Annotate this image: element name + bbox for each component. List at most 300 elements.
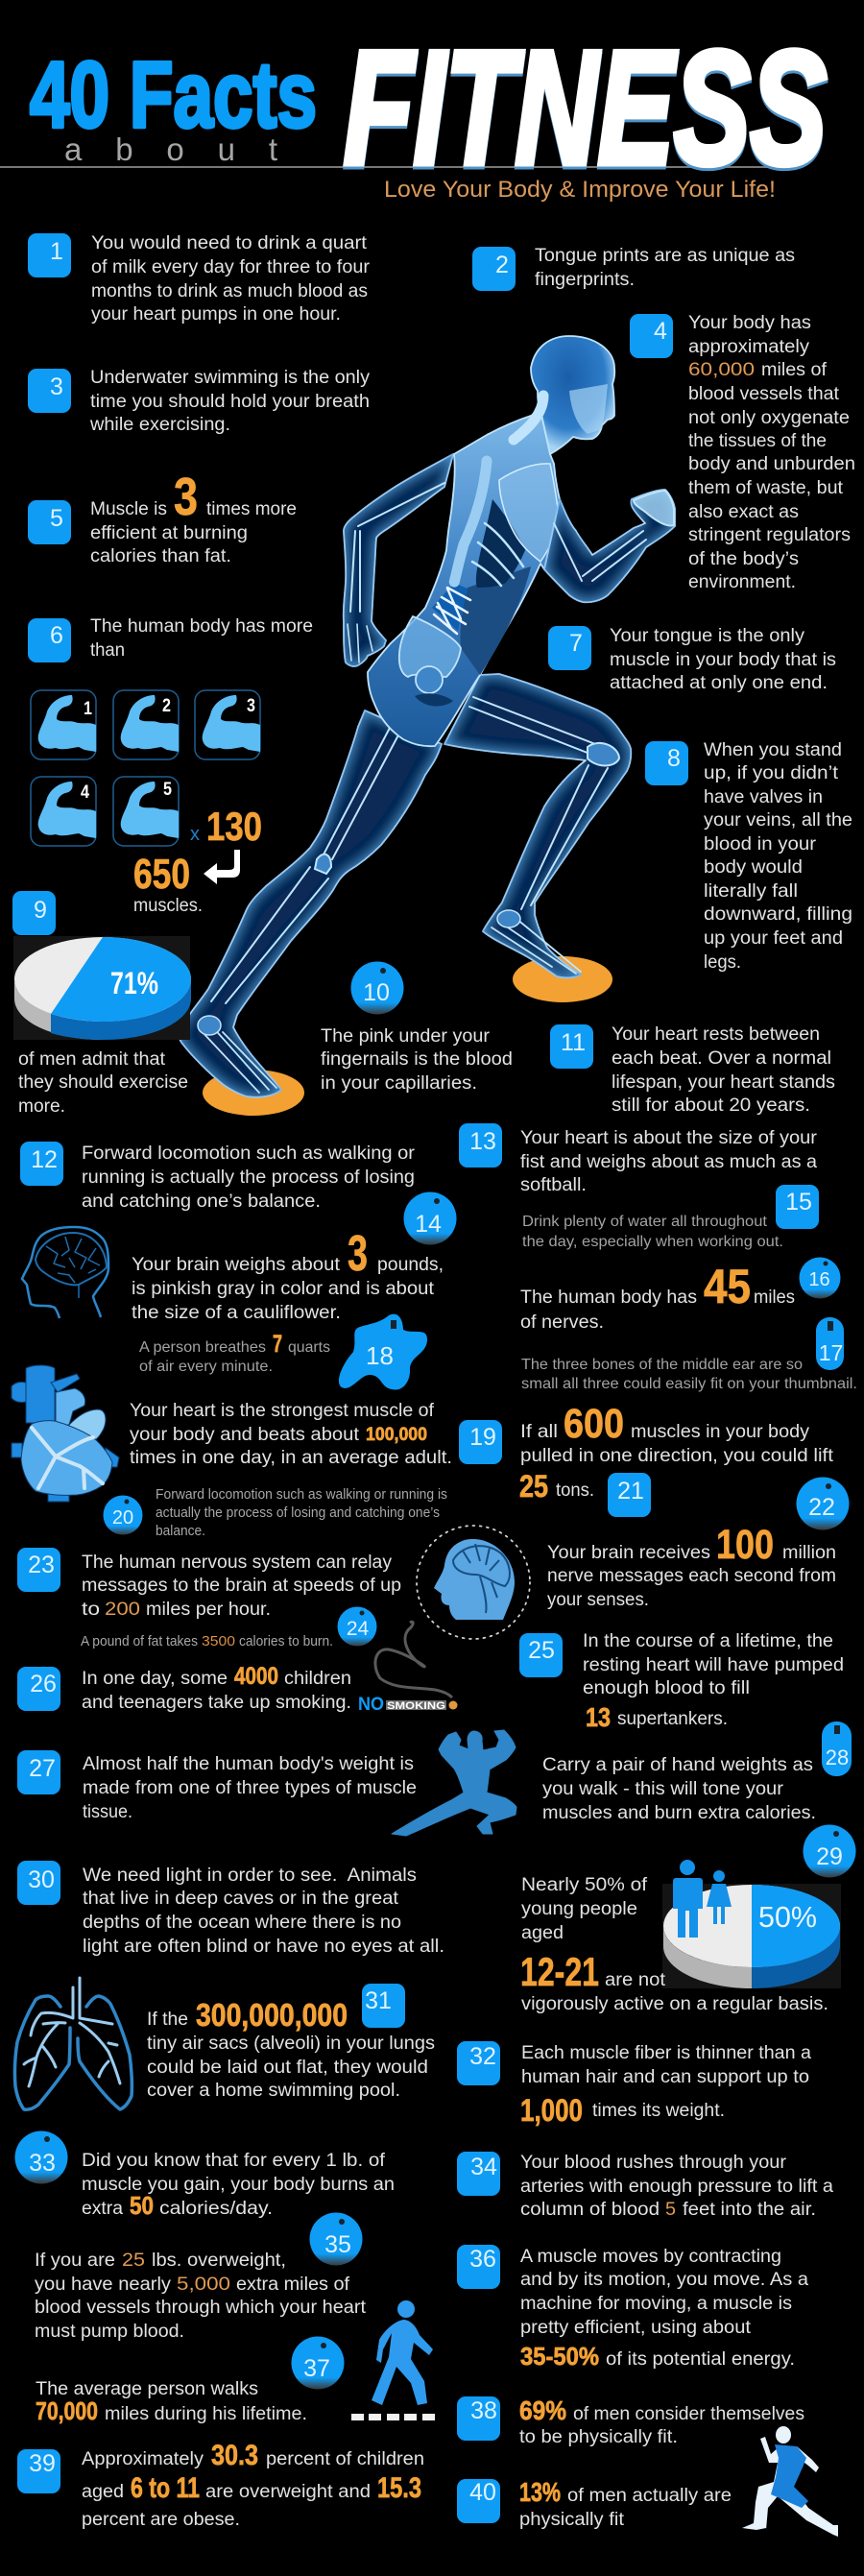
badge 32 xyxy=(457,2041,500,2085)
badge 25 xyxy=(519,1633,563,1677)
badge 8: 8 xyxy=(667,745,681,772)
torso and hip xyxy=(368,410,576,746)
fact 32 text: times its weight. xyxy=(592,2101,725,2121)
badge 39 xyxy=(17,2449,60,2493)
badge 5 xyxy=(28,500,71,544)
fact 9 text xyxy=(18,1049,188,1117)
fact 10 text: fingernails is the blood xyxy=(321,1049,513,1070)
no smoking cigarette with smoke: NO xyxy=(358,1695,384,1715)
pie chart 71 percent: 71% xyxy=(110,966,158,1000)
fact 7 text: muscle in your body that is xyxy=(610,650,836,670)
fact 38 text: of men consider themselves xyxy=(573,2404,804,2424)
fact 24 text: 3500 xyxy=(202,1633,235,1649)
badge 6 xyxy=(28,618,71,662)
fact 12 text: and catching one’s balance. xyxy=(82,1192,321,1212)
fact 4 text: Your body has xyxy=(688,313,811,333)
fact 32 xyxy=(457,2041,811,2128)
fact 14 text xyxy=(132,1226,444,1323)
fact 2 text xyxy=(535,246,795,290)
fact 12 text xyxy=(82,1144,416,1212)
fact 5 text xyxy=(90,467,297,566)
fact 4 text: blood vessels that xyxy=(688,384,840,404)
rear leg xyxy=(179,710,442,1097)
title: about: about xyxy=(64,132,277,167)
pelvis xyxy=(399,616,461,706)
belly xyxy=(460,566,531,675)
fact 31 text: tiny air sacs (alveoli) in your lungs xyxy=(147,2034,435,2054)
icon: flexed arm 4 xyxy=(31,777,96,846)
tag 14: 14 xyxy=(415,1211,442,1238)
fact 19 text: 25 xyxy=(519,1469,548,1504)
fact 16 text: of nerves. xyxy=(520,1312,604,1333)
fact 18 text: A person breathes xyxy=(139,1339,266,1356)
fact 10 text xyxy=(321,1026,513,1094)
fact 34 text: column of blood xyxy=(520,2200,660,2220)
badge 36: 36 xyxy=(469,2246,496,2273)
fact 12 xyxy=(20,1142,416,1212)
fact 6 xyxy=(28,616,313,916)
fact 28 text: you walk - this will tone your xyxy=(542,1779,784,1799)
tag 22 xyxy=(797,1477,849,1530)
rule xyxy=(0,166,778,168)
badge 12: 12 xyxy=(31,1146,58,1173)
fact 4 text: body and unburden xyxy=(688,454,855,474)
fact 33 text: Did you know that for every 1 lb. of xyxy=(82,2151,386,2171)
fact 5 text: calories than fat. xyxy=(90,546,231,566)
fact 35 text: If you are xyxy=(35,2251,115,2271)
badge 27: 27 xyxy=(29,1755,56,1782)
fact 7 text: attached at only one end. xyxy=(610,673,828,693)
rear arm bones xyxy=(348,483,444,662)
badge 26 xyxy=(17,1667,60,1711)
fact 2 text: fingerprints. xyxy=(535,270,635,290)
badge 2 xyxy=(472,247,516,291)
fact 30 text xyxy=(83,1866,444,1957)
fact 16 text: 45 xyxy=(704,1260,751,1313)
fact 4 text: 60,000 xyxy=(688,360,755,380)
fact 32 text: human hair and can support up to xyxy=(521,2067,809,2087)
fact 29 text: vigorously active on a regular basis. xyxy=(521,1994,828,2014)
badge 6: 6 xyxy=(50,622,63,649)
fact 39 xyxy=(17,2440,424,2530)
fact 34 xyxy=(457,2152,833,2220)
fact 25 text: enough blood to fill xyxy=(583,1678,750,1698)
fact 5 text: 3 xyxy=(174,467,198,526)
badge 27 xyxy=(17,1750,60,1794)
lumbar block xyxy=(432,583,468,631)
fact 39 text: 6 to 11 xyxy=(131,2472,200,2504)
badge 21 xyxy=(608,1473,651,1517)
fact 15 text: Drink plenty of water all throughout xyxy=(522,1214,768,1230)
fact 13 text: softball. xyxy=(520,1175,587,1195)
ribcage hollow xyxy=(476,499,525,588)
fact 14 text: is pinkish gray in color and is about xyxy=(132,1279,435,1299)
fact 4 xyxy=(630,313,855,592)
fact 6 text: than xyxy=(90,640,125,661)
front leg bones xyxy=(469,697,619,974)
fact 15 text: the day, especially when working out. xyxy=(522,1234,783,1250)
front arm xyxy=(544,490,675,602)
tag 29: 29 xyxy=(816,1843,843,1870)
badge 13 xyxy=(459,1123,502,1168)
icon: running man xyxy=(742,2426,838,2537)
fact 20 text: Forward locomotion such as walking or running is xyxy=(156,1486,447,1503)
fact 31 xyxy=(147,1984,435,2101)
fact 16 text: miles xyxy=(754,1288,795,1308)
icon: flexed arm 2 xyxy=(113,690,179,759)
badge 1: 1 xyxy=(50,238,63,265)
badge 2: 2 xyxy=(495,252,509,278)
fact 37 xyxy=(36,2300,435,2425)
fact 29 text: are not xyxy=(605,1970,666,1990)
fact 39 text xyxy=(82,2440,424,2530)
fact 13 text: fist and weighs about as much as a xyxy=(520,1152,817,1172)
fact 20 text xyxy=(156,1486,447,1539)
tag 28 xyxy=(822,1721,852,1776)
badge 3: 3 xyxy=(50,373,63,400)
fact 23 text: to xyxy=(82,1600,100,1620)
badge 15: 15 xyxy=(785,1189,812,1216)
icon: dashed ground xyxy=(351,2414,435,2420)
fact 29 text: young people xyxy=(521,1899,637,1919)
fact 27 text: Almost half the human body's weight is xyxy=(83,1754,414,1774)
fact 7 xyxy=(548,626,836,693)
fact 39 text: 15.3 xyxy=(377,2472,421,2504)
fact 1 text xyxy=(91,233,371,325)
fact 23 text: The human nervous system can relay xyxy=(82,1553,393,1573)
fact 34 text: feet into the air. xyxy=(683,2200,816,2220)
fact 8 text: up, if you didn’t xyxy=(704,763,839,783)
fact 9 xyxy=(12,891,191,1117)
neck vertebrae xyxy=(514,396,543,440)
fact 8 text: blood in your xyxy=(704,834,817,855)
fact 4 text: not only oxygenate xyxy=(688,408,850,428)
fact 28 xyxy=(542,1721,852,1823)
fact 8 text: When you stand xyxy=(704,740,842,760)
fact 19 text: If all xyxy=(520,1422,558,1442)
icon: man and woman xyxy=(673,1860,732,1938)
fact 14 text: the size of a cauliflower. xyxy=(132,1303,341,1323)
fact 4 text: environment. xyxy=(688,572,796,592)
badge 36 xyxy=(457,2245,500,2289)
fact 11 text xyxy=(612,1024,835,1116)
fact 35 text: must pump blood. xyxy=(35,2322,184,2342)
fact 8 text: body would xyxy=(704,857,803,878)
fact 8 text: your veins, all the xyxy=(704,810,852,831)
fact 8 text: up your feet and xyxy=(704,928,843,949)
tag 16: 16 xyxy=(808,1269,830,1290)
fact 3 text: Underwater swimming is the only xyxy=(90,368,371,388)
fact 4 text: also exact as xyxy=(688,502,799,522)
fact 33 text: extra xyxy=(82,2199,123,2219)
badge 38 xyxy=(457,2396,500,2441)
fact 34 text: arteries with enough pressure to lift a xyxy=(520,2177,833,2197)
fact 22 text: Your brain receives xyxy=(547,1543,710,1563)
fact 19 text: pulled in one direction, you could lift xyxy=(520,1446,834,1466)
fact 1 text: of milk every day for three to four xyxy=(91,257,371,277)
tag 10: 10 xyxy=(363,979,390,1006)
badge 7: 7 xyxy=(569,630,583,657)
fact 11 xyxy=(550,1024,835,1116)
fact 35 text: 25 xyxy=(122,2251,145,2271)
tagline: Love Your Body & Improve Your Life! xyxy=(384,177,776,203)
badge 25: 25 xyxy=(528,1637,555,1664)
fact 25 text: supertankers. xyxy=(617,1709,728,1729)
fact 40 xyxy=(457,2477,732,2530)
badge 34 xyxy=(457,2152,500,2196)
fact 5 text: times more xyxy=(206,499,297,519)
fact 33 text: muscle you gain, your body burns an xyxy=(82,2175,395,2195)
fact 6 text xyxy=(90,616,313,661)
fact 13 text: Your heart is about the size of your xyxy=(520,1128,818,1148)
fact 27 text: tissue. xyxy=(83,1802,132,1822)
badge 1 xyxy=(28,233,71,277)
fact 4 text: miles of xyxy=(761,360,828,380)
fact 40 text: of men actually are xyxy=(567,2486,732,2506)
fact 19 text: muscles in your body xyxy=(631,1422,810,1442)
fact: heart strongest muscle: times in one day, in an average adult. xyxy=(130,1448,452,1468)
fact 1 text: months to drink as much blood as xyxy=(91,281,368,301)
skull face bones xyxy=(569,384,608,434)
fact 27 xyxy=(17,1730,516,1836)
fact 28 text xyxy=(542,1755,816,1823)
fact 6 text: The human body has more xyxy=(90,616,313,637)
fact 35 xyxy=(35,2212,367,2342)
fact 12 text: running is actually the process of losing xyxy=(82,1168,415,1188)
fact 38 text xyxy=(519,2395,804,2447)
fact 39 text: are overweight and xyxy=(205,2482,371,2502)
head xyxy=(531,336,614,454)
tag 16 xyxy=(799,1258,841,1298)
multiplier x 130: x xyxy=(190,824,200,845)
tag 33 xyxy=(15,2131,67,2183)
badge 21: 21 xyxy=(617,1478,644,1505)
icon: flexed arm 2: 2 xyxy=(162,696,171,716)
badge 15 xyxy=(776,1185,819,1229)
icon: flexed arm 1: 1 xyxy=(84,699,92,719)
front leg xyxy=(444,674,631,977)
fact 8 text: legs. xyxy=(704,952,741,973)
fact 31 text: If the xyxy=(147,2010,188,2030)
fact: heart strongest muscle xyxy=(130,1401,452,1468)
fact 1 xyxy=(28,233,371,325)
badge 3 xyxy=(28,369,71,413)
fact 32 text: 1,000 xyxy=(520,2093,583,2128)
fact 3 text: while exercising. xyxy=(89,415,230,435)
fact 36 text: and by its motion, you move. As a xyxy=(520,2270,808,2290)
fact: heart strongest muscle: your body and beats about xyxy=(130,1425,360,1445)
fact 36 text xyxy=(520,2247,808,2371)
fact 36 text: A muscle moves by contracting xyxy=(520,2247,781,2267)
rear arm xyxy=(344,454,453,666)
fact 33 xyxy=(15,2131,395,2220)
fact 30 text: that live in deep caves or in the great xyxy=(83,1889,399,1909)
fact 33 text: calories/day. xyxy=(159,2199,273,2219)
fact 14 text: Your brain weighs about xyxy=(132,1255,341,1275)
runner figure on orange discs xyxy=(179,336,675,1116)
fact 19 text: tons. xyxy=(556,1481,594,1501)
badge 12 xyxy=(20,1142,63,1186)
fact 23 text: messages to the brain at speeds of up xyxy=(82,1576,401,1596)
fact 17 text xyxy=(521,1357,857,1392)
header xyxy=(0,17,827,203)
fact 30 xyxy=(17,1861,444,1957)
fact 29 text: 12-21 xyxy=(520,1949,599,1994)
fact 2 xyxy=(472,246,795,291)
fact 8 text: downward, filling xyxy=(704,904,852,925)
badge 23: 23 xyxy=(28,1552,55,1578)
fact 3 text: time you should hold your breath xyxy=(90,392,370,412)
fact 26 xyxy=(17,1622,457,1715)
fact 12 text: Forward locomotion such as walking or xyxy=(82,1144,416,1164)
tag 14 xyxy=(403,1192,457,1244)
tag 10 xyxy=(351,962,403,1014)
fact 30 text: depths of the ocean where there is no xyxy=(83,1913,401,1933)
icon: flexed arm 4: 4 xyxy=(81,782,89,803)
icon: lungs xyxy=(14,1978,132,2109)
fact 37 text: The average person walks xyxy=(36,2379,258,2399)
fact 34 text: 5 xyxy=(665,2200,676,2220)
fact 34 text: Your blood rushes through your xyxy=(520,2153,787,2173)
fact 39 text: percent are obese. xyxy=(82,2510,240,2530)
fact 7 text: Your tongue is the only xyxy=(610,626,805,646)
fact: heart strongest muscle: 100,000 xyxy=(366,1425,427,1445)
fact 40 text: physically fit xyxy=(519,2510,625,2530)
icon: flexed arm 5 xyxy=(113,777,179,846)
badge 5: 5 xyxy=(50,505,63,532)
tag 18 blob xyxy=(339,1314,427,1389)
fact 18 text: quarts xyxy=(288,1339,330,1356)
fact 19 text xyxy=(519,1401,834,1504)
fact 15 xyxy=(522,1185,819,1250)
arrow: return xyxy=(204,850,240,884)
fact 13 text xyxy=(520,1128,818,1195)
fact 37 text: 70,000 xyxy=(36,2396,98,2425)
fact 29 text xyxy=(520,1875,828,2014)
fact 32 text: Each muscle fiber is thinner than a xyxy=(521,2043,811,2063)
fact 14 xyxy=(22,1192,457,1323)
tag 28: 28 xyxy=(826,1745,849,1769)
fact 23 text: miles per hour. xyxy=(146,1600,271,1620)
tag 20 xyxy=(104,1496,142,1534)
fact 37 text xyxy=(36,2379,307,2425)
tag 35: 35 xyxy=(324,2231,351,2258)
fact 8 text: have valves in xyxy=(704,787,823,807)
badge 9: 9 xyxy=(34,897,47,924)
fact 23 text xyxy=(82,1553,401,1620)
fact 17 text: The three bones of the middle ear are so xyxy=(521,1357,803,1373)
fact 11 text: each beat. Over a normal xyxy=(612,1048,831,1069)
fact 25 text: In the course of a lifetime, the xyxy=(583,1631,833,1651)
fact 11 text: still for about 20 years. xyxy=(612,1095,810,1116)
fact 38 xyxy=(457,2395,804,2447)
fact 30 text: We need light in order to see. Animals xyxy=(83,1866,417,1886)
fact 36 text: machine for moving, a muscle is xyxy=(520,2294,792,2314)
fact 20 xyxy=(104,1486,447,1539)
fact 4 text xyxy=(688,313,855,592)
fact 39 text: 30.3 xyxy=(211,2440,258,2471)
fact 20 text: balance. xyxy=(156,1523,205,1539)
fact 34 text xyxy=(520,2153,833,2220)
fact 36 text: 35-50% xyxy=(520,2342,599,2371)
fact 31 text xyxy=(147,1997,435,2101)
fact 36 text: of its potential energy. xyxy=(606,2349,795,2370)
front arm bones and fist xyxy=(554,491,674,581)
fact 25 text: resting heart will have pumped xyxy=(583,1655,844,1675)
icon: flexed arm 3: 3 xyxy=(247,696,255,716)
fact 4 text: the tissues of the xyxy=(688,431,827,451)
fact 3 text xyxy=(89,368,371,435)
fact 9 text: more. xyxy=(18,1096,65,1117)
fact 13 xyxy=(459,1123,818,1195)
fact 35 text: lbs. overweight, xyxy=(152,2251,286,2271)
fact 19 and 21 xyxy=(459,1401,834,1517)
fact 8 text xyxy=(704,740,852,973)
fact 2 text: Tongue prints are as unique as xyxy=(535,246,795,266)
muscles label: muscles. xyxy=(133,896,203,916)
fact 33 text: 50 xyxy=(130,2191,154,2220)
pie chart 50 percent xyxy=(662,1884,841,1988)
fact 22 text: million xyxy=(782,1543,836,1563)
fact 26 text: children xyxy=(284,1669,351,1689)
badge 40 xyxy=(457,2479,500,2523)
icon: bodybuilder xyxy=(392,1730,516,1836)
fact 26 text xyxy=(82,1663,351,1713)
tag 17 xyxy=(816,1317,844,1370)
fact 26 text: In one day, some xyxy=(82,1669,228,1689)
fact 35 text: blood vessels through which your heart xyxy=(35,2298,367,2318)
fact 5 xyxy=(28,467,297,566)
fact 31 text: could be laid out flat, they would xyxy=(147,2058,428,2078)
spine xyxy=(434,461,487,634)
fact 35 text: 5,000 xyxy=(177,2275,230,2295)
fact: heart strongest muscle: Your heart is the strongest muscle of xyxy=(130,1401,435,1421)
fact 36 text: pretty efficient, using about xyxy=(520,2318,752,2338)
tag 18 blob: 18 xyxy=(366,1341,394,1370)
fact 4 text: of the body’s xyxy=(688,549,799,569)
upper arm overlay xyxy=(499,464,560,562)
fact 18 text: of air every minute. xyxy=(139,1359,273,1375)
fact 22 text: 100 xyxy=(716,1522,774,1568)
icon: flexed arm 1 xyxy=(31,690,96,759)
fact 10 text: in your capillaries. xyxy=(321,1073,477,1094)
fact 18 text: 7 xyxy=(273,1331,282,1358)
tag 29 xyxy=(803,1824,856,1878)
fact 4 text: stringent regulators xyxy=(688,525,851,545)
fact 16 text xyxy=(520,1260,795,1333)
icon: flexed arm 5: 5 xyxy=(163,780,172,800)
fact 15 text xyxy=(522,1214,783,1250)
fact 17 xyxy=(521,1317,857,1392)
fact 19 text: 600 xyxy=(564,1401,624,1447)
title: 40 Facts: 40 Facts xyxy=(30,42,317,147)
no smoking cigarette with smoke xyxy=(358,1622,457,1715)
fact 22 text: your senses. xyxy=(547,1590,649,1610)
fact 39 text: Approximately xyxy=(82,2449,204,2469)
fact 10 xyxy=(321,962,513,1094)
ribs xyxy=(472,523,523,586)
fact 24 text: calories to burn. xyxy=(239,1633,333,1649)
badge 26: 26 xyxy=(30,1671,57,1697)
icon: flexed arm 3 xyxy=(195,690,260,759)
fact 39 text: percent of children xyxy=(266,2449,424,2469)
fact 31 text: cover a home swimming pool. xyxy=(147,2081,400,2101)
fact 35 text xyxy=(35,2251,367,2342)
pie chart 50 percent: 50% xyxy=(758,1900,817,1934)
tag 22: 22 xyxy=(808,1494,835,1521)
fact 1 text: your heart pumps in one hour. xyxy=(91,304,341,325)
total 650: 650 xyxy=(133,851,190,898)
